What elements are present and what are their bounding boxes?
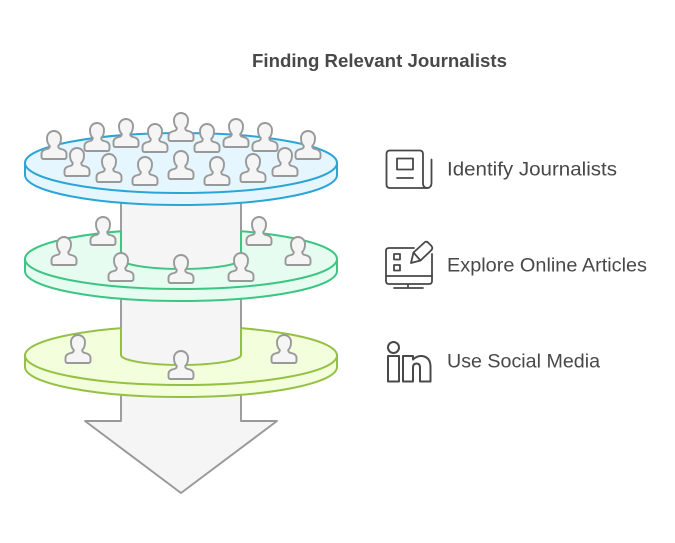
icon: newspaper — [386, 150, 432, 188]
column: upper section — [121, 198, 241, 269]
icon: monitor with pencil — [386, 242, 432, 288]
column: lower section — [121, 295, 241, 365]
title: Finding Relevant Journalists — [252, 51, 507, 71]
people: middle disk — [52, 217, 310, 283]
label: use social media: Use Social Media — [447, 350, 600, 372]
people: bottom disk — [66, 335, 296, 379]
label: identify journalists: Identify Journalists — [447, 158, 617, 180]
people: top disk — [42, 113, 320, 185]
label: explore online articles: Explore Online Articles — [447, 254, 647, 276]
arrow: downward flow — [85, 390, 277, 493]
panel: middle disk — [25, 229, 337, 301]
icon: linkedin — [388, 342, 430, 382]
panel: top disk — [25, 133, 337, 205]
panel: bottom disk — [25, 326, 337, 397]
